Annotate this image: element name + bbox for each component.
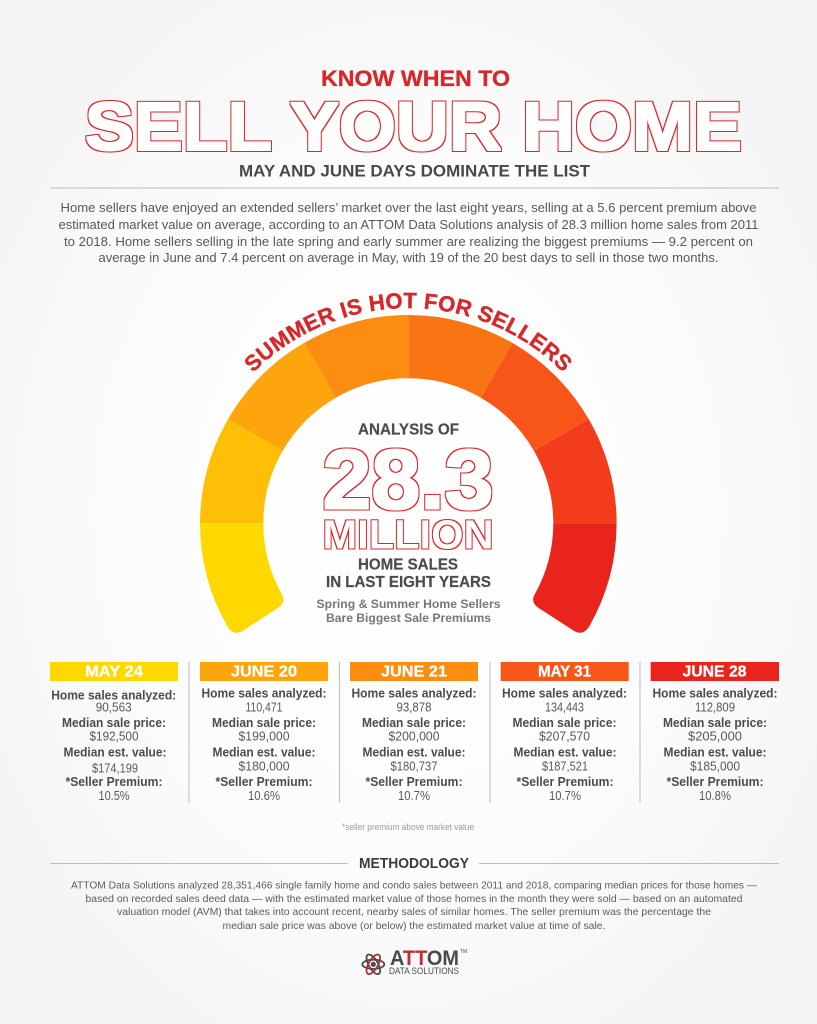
panel: may 24: Home sales analyzed: bbox=[51, 687, 176, 702]
panel: may 24: MAY 24 bbox=[85, 664, 143, 681]
intro paragraph: Home sellers have enjoyed an extended sellers’ market over the last eight years, selling at a 5.6 percent premium above bbox=[60, 201, 756, 215]
panel: june 28: Home sales analyzed: bbox=[652, 685, 778, 700]
panel: june 28: JUNE 28 bbox=[682, 664, 747, 681]
gauge centre text: ANALYSIS OF bbox=[358, 422, 459, 438]
panel: june 20: $199,000 bbox=[238, 730, 290, 744]
panel: june 21: JUNE 21 bbox=[381, 664, 447, 681]
panel: june 28: 10.8% bbox=[699, 789, 731, 803]
intro paragraph: estimated market value on average, according to an ATTOM Data Solutions analysis of 28.3 million home sales from 2011 bbox=[58, 218, 758, 232]
panel: june 21: Median sale price: bbox=[362, 715, 466, 730]
gauge centre text: IN LAST EIGHT YEARS bbox=[326, 574, 491, 591]
million: MILLION bbox=[322, 511, 494, 557]
panel: may 24: Median est. value: bbox=[64, 744, 166, 760]
kicker: know when to: KNOW WHEN TO bbox=[321, 66, 510, 91]
panel: june 21 bbox=[350, 662, 478, 803]
panel: may 24 bbox=[50, 662, 178, 803]
panel: june 28: 112,809 bbox=[695, 700, 735, 714]
panel: june 20: 110,471 bbox=[246, 700, 283, 714]
curved heading: SUMMER IS HOT FOR SELLERS bbox=[245, 292, 572, 371]
gauge segment 1: yellow end bbox=[200, 523, 283, 633]
gauge segment 7 bbox=[534, 419, 617, 523]
panel: june 28: Median sale price: bbox=[663, 715, 767, 730]
panel: june 20: *Seller Premium: bbox=[216, 774, 312, 789]
panel: june 20 bbox=[200, 662, 328, 803]
panel: may 24: Median sale price: bbox=[62, 715, 166, 730]
panel: may 31: 134,443 bbox=[545, 700, 584, 714]
panel: may 31: $207,570 bbox=[539, 730, 590, 744]
panel: june 20: JUNE 20 bbox=[231, 664, 297, 681]
panel: june 28: Median est. value: bbox=[664, 744, 766, 760]
gauge segment 6 bbox=[481, 343, 589, 451]
methodology heading: METHODOLOGY bbox=[359, 856, 469, 872]
methodology text: ATTOM Data Solutions analyzed 28,351,466 single family home and condo sales between 2011 and 2018, comparing median prices for those homes — bbox=[71, 880, 758, 892]
panel: june 28: *Seller Premium: bbox=[666, 774, 764, 789]
gauge segment 5 bbox=[408, 315, 512, 398]
panel: may 24: 90,563 bbox=[96, 700, 132, 714]
methodology text: median sale price was above (or below) the estimated market value at time of sale. bbox=[222, 921, 606, 932]
gauge centre text: Spring & Summer Home Sellers bbox=[316, 599, 500, 611]
panel: june 20: Median sale price: bbox=[212, 715, 316, 730]
panel: june 20: 10.6% bbox=[248, 789, 280, 803]
wordmark: ATTOM bbox=[390, 947, 459, 970]
panel: june 21: Median est. value: bbox=[362, 744, 466, 760]
panel: may 31: 10.7% bbox=[549, 789, 581, 803]
gauge chart bbox=[200, 292, 617, 633]
subtitle: MAY AND JUNE DAYS DOMINATE THE LIST bbox=[239, 162, 591, 180]
big number: 28.3 bbox=[322, 432, 494, 526]
gauge segment 8: red end bbox=[533, 523, 617, 633]
title block bbox=[85, 66, 742, 180]
panel: may 31: Home sales analyzed: bbox=[502, 685, 627, 700]
methodology text bbox=[71, 880, 758, 932]
logo: attom data solutions: TM bbox=[460, 949, 467, 955]
panel: june 21: Home sales analyzed: bbox=[352, 685, 476, 700]
methodology text: based on recorded sales deed data — with the estimated market value of those homes in the month they were sold — based on an automated bbox=[86, 894, 743, 905]
panel: june 28 bbox=[651, 662, 779, 803]
panel: may 31: *Seller Premium: bbox=[516, 774, 614, 789]
gauge centre text: Bare Biggest Sale Premiums bbox=[326, 613, 491, 625]
panel: june 20: $180,000 bbox=[238, 760, 290, 774]
panel: june 28: $205,000 bbox=[688, 730, 742, 744]
intro paragraph: to 2018. Home sellers selling in the late spring and early summer are realizing the biggest premiums — 9.2 percent on bbox=[64, 235, 753, 249]
icon: atom mark bbox=[362, 952, 384, 976]
panel: may 24: *Seller Premium: bbox=[66, 774, 162, 789]
panel: may 31: $187,521 bbox=[542, 760, 588, 774]
main title: sell your home: SELL YOUR HOME bbox=[85, 88, 742, 165]
methodology text: valuation model (AVM) that takes into account recent, nearby sales of similar homes. The seller premium was the percentage the bbox=[117, 907, 711, 918]
footnote: *seller premium above market value bbox=[342, 822, 474, 832]
panel: may 24: $192,500 bbox=[90, 730, 139, 744]
panel: may 24: $174,199 bbox=[92, 762, 138, 776]
gauge segment 3 bbox=[228, 343, 336, 451]
panel: june 20: Home sales analyzed: bbox=[202, 685, 326, 700]
panel: may 24: 10.5% bbox=[98, 789, 130, 803]
panel: may 31: Median sale price: bbox=[512, 715, 616, 730]
gauge segment 2 bbox=[200, 419, 283, 523]
logo: attom data solutions bbox=[362, 947, 467, 977]
gauge segment 4 bbox=[304, 315, 408, 398]
panel: june 21: $180,737 bbox=[390, 760, 438, 774]
panel: may 31: Median est. value: bbox=[514, 744, 616, 760]
intro paragraph bbox=[58, 201, 758, 265]
panel: june 28: $185,000 bbox=[690, 760, 740, 774]
panel: june 21: 10.7% bbox=[398, 789, 430, 803]
gauge centre text: HOME SALES bbox=[358, 556, 458, 574]
panel: may 31 bbox=[501, 662, 629, 803]
intro paragraph: average in June and 7.4 percent on average in May, with 19 of the 20 best days to sell in those two months. bbox=[98, 251, 718, 265]
panel: june 21: *Seller Premium: bbox=[366, 774, 462, 789]
panel: june 21: 93,878 bbox=[396, 700, 432, 714]
gauge centre text bbox=[316, 422, 500, 625]
logo: attom data solutions: DATA SOLUTIONS bbox=[389, 966, 459, 977]
panel: june 20: Median est. value: bbox=[212, 744, 316, 760]
panel: may 31: MAY 31 bbox=[538, 664, 591, 681]
panel: june 21: $200,000 bbox=[388, 730, 440, 744]
